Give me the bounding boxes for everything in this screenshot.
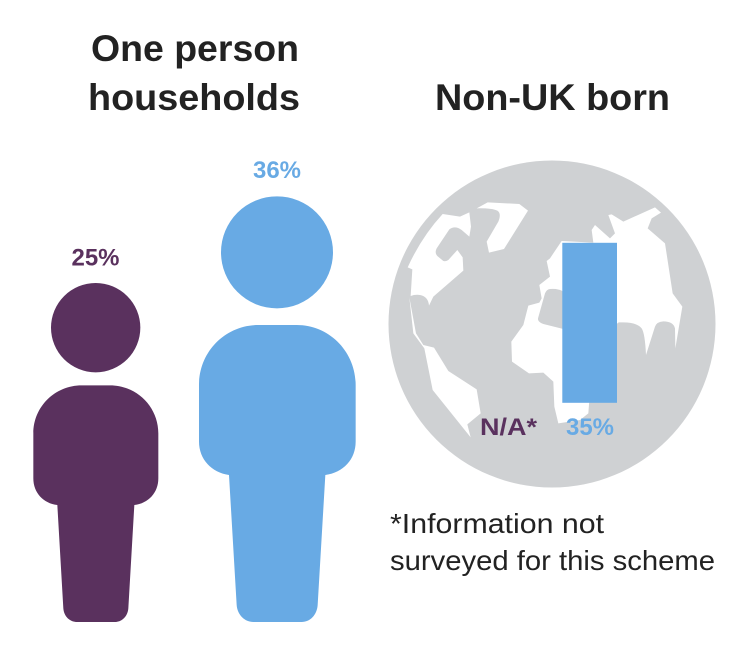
land: central continent	[511, 207, 682, 423]
footnote: *Information not	[390, 508, 604, 539]
icon: purple person	[33, 283, 158, 622]
land: north west	[408, 212, 471, 306]
heading: one person households	[88, 28, 300, 118]
land: central island	[538, 289, 563, 329]
icon: globe	[388, 160, 716, 488]
heading: one person households: households	[88, 77, 300, 118]
heading: non-UK born: Non-UK born	[435, 77, 670, 118]
footnote	[390, 508, 715, 576]
label: 25 percent: 25%	[72, 244, 120, 272]
bar: 35 percent	[562, 243, 617, 403]
label: 36 percent: 36%	[253, 157, 301, 184]
label: 35 percent: 35%	[566, 414, 614, 441]
label: not available: N/A*	[480, 414, 538, 441]
heading: one person households: One person	[91, 28, 299, 69]
land: western continent	[409, 297, 481, 437]
icon: blue person	[199, 196, 356, 622]
footnote: surveyed for this scheme	[390, 545, 715, 576]
land: northern island	[477, 202, 528, 253]
